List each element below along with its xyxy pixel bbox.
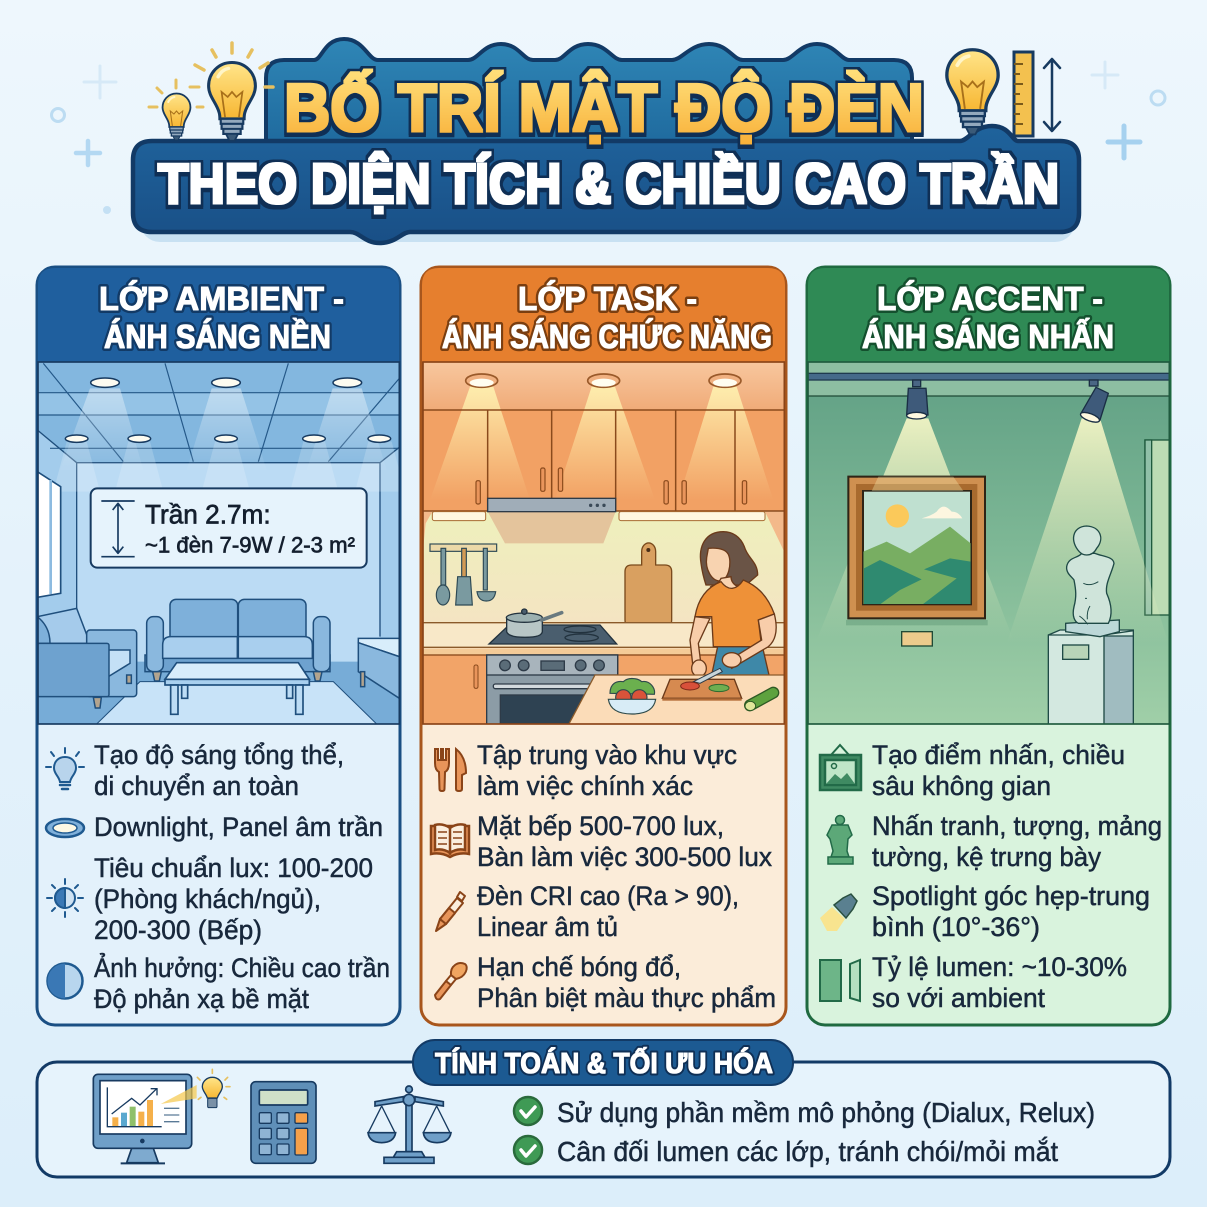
icon: right bulb bbox=[947, 50, 998, 134]
callout: ceiling height bbox=[91, 488, 367, 568]
armchair bbox=[37, 608, 137, 708]
title banner bbox=[133, 39, 1079, 243]
text block: ambient: di chuyển an toàn bbox=[94, 771, 299, 801]
icon: contrast circle bbox=[48, 964, 82, 998]
icon: half sun bbox=[47, 879, 83, 917]
icon: balance scale bbox=[368, 1086, 451, 1163]
woman bbox=[690, 532, 776, 677]
utensil rack bbox=[430, 544, 497, 605]
panel: optimisation bbox=[37, 1040, 1170, 1177]
ceiling soffit bbox=[422, 362, 788, 410]
text block: accent: so với ambient bbox=[872, 983, 1045, 1013]
heading: LỚP ACCENT - bbox=[877, 280, 1103, 317]
text block: ambient: 200-300 (Bếp) bbox=[94, 915, 262, 945]
lower cabinets bbox=[422, 655, 788, 725]
banner upper shape bbox=[266, 39, 912, 145]
right wall panel bbox=[1144, 439, 1168, 616]
illustration: living room bbox=[37, 362, 405, 725]
title line 2: THEO DIỆN TÍCH & CHIỀU CAO TRẦN bbox=[158, 151, 1059, 216]
placard bbox=[902, 632, 932, 646]
text block: ambient: Downlight, Panel âm trần bbox=[94, 812, 383, 842]
text block: task: làm việc chính xác bbox=[477, 771, 693, 801]
text block: ambient: Tạo độ sáng tổng thể, bbox=[94, 740, 344, 770]
icon: calculator bbox=[251, 1082, 316, 1163]
panel header bbox=[422, 268, 785, 362]
text block: task: Đèn CRI cao (Ra > 90), bbox=[477, 881, 739, 911]
heading: LỚP TASK - bbox=[518, 280, 697, 317]
cucumber bbox=[745, 693, 773, 711]
heading: ÁNH SÁNG NỀN bbox=[104, 318, 331, 355]
salad bowl bbox=[608, 679, 656, 714]
range hood bbox=[488, 498, 616, 512]
panel body bbox=[807, 267, 1170, 1025]
icon: statue small bbox=[827, 816, 853, 864]
side cabinet bbox=[358, 638, 399, 698]
icon: picture bbox=[820, 745, 861, 790]
cabinets bbox=[422, 410, 788, 511]
banner shadow bbox=[140, 150, 1075, 242]
oven bbox=[487, 655, 618, 725]
rug bbox=[97, 682, 377, 724]
icon: marker pen bbox=[436, 892, 465, 931]
icon: large bulb bbox=[195, 43, 273, 141]
panel: task bbox=[37, 267, 1175, 1177]
banner lower shape bbox=[133, 126, 1079, 243]
picture bbox=[846, 477, 988, 625]
text block: accent: bình (10°-36°) bbox=[872, 912, 1040, 942]
heading bbox=[99, 280, 344, 355]
coffee table bbox=[165, 663, 309, 714]
text block: task: Linear âm tủ bbox=[477, 912, 618, 942]
text block: ambient: (Phòng khách/ngủ), bbox=[94, 884, 321, 914]
text block: accent: Tạo điểm nhấn, chiều bbox=[872, 740, 1125, 770]
icon: brush bbox=[435, 963, 467, 1000]
icon: panels bbox=[820, 960, 860, 1001]
panel: accent bbox=[37, 267, 1175, 1177]
check item 1: Sử dụng phần mềm mô phỏng (Dialux, Relux) bbox=[557, 1097, 1095, 1128]
title line 1: BỐ TRÍ MẬT ĐỘ ĐÈN bbox=[284, 69, 924, 146]
check item 2: Cân đối lumen các lớp, tránh chói/mỏi mắt bbox=[557, 1136, 1058, 1167]
sofa bbox=[145, 599, 330, 681]
text block: accent: sâu không gian bbox=[872, 771, 1051, 801]
text block: accent: Spotlight góc hẹp-trung bbox=[872, 881, 1150, 911]
icon: ruler bbox=[1014, 52, 1033, 136]
icon: light bulb bbox=[46, 748, 84, 789]
panel: ambient bbox=[37, 267, 1175, 1177]
pedestal bbox=[1048, 620, 1133, 725]
panel body bbox=[37, 267, 400, 1025]
icon: flashlight bbox=[820, 894, 857, 931]
text block: task bbox=[477, 740, 776, 1013]
heading bbox=[862, 280, 1114, 355]
heading pill bbox=[413, 1040, 793, 1085]
beam left bbox=[824, 418, 1006, 622]
illustration: gallery bbox=[807, 362, 1175, 725]
chopping board bbox=[662, 668, 742, 701]
panel body bbox=[421, 267, 786, 1025]
track spotlight left bbox=[907, 380, 928, 419]
cooktop and pot bbox=[489, 609, 617, 644]
text block: task: Phân biệt màu thực phẩm bbox=[477, 983, 776, 1013]
statue bbox=[1067, 526, 1114, 624]
text block: ambient: Độ phản xạ bề mặt bbox=[94, 984, 309, 1014]
light beams bbox=[435, 386, 768, 488]
text block: accent: Tỷ lệ lumen: ~10-30% bbox=[872, 952, 1127, 982]
heading: ÁNH SÁNG NHẤN bbox=[862, 318, 1114, 355]
track spotlight right bbox=[1079, 380, 1108, 424]
heading pill: TÍNH TOÁN & TỐI ƯU HÓA bbox=[435, 1046, 773, 1080]
icon: small bulb with rays bbox=[197, 1069, 230, 1108]
callout: ceiling height: Trần 2.7m: bbox=[145, 499, 271, 529]
icon: fork and knife bbox=[435, 749, 466, 791]
text block: accent bbox=[872, 740, 1162, 1013]
front counter bbox=[568, 675, 785, 725]
text block: task: Hạn chế bóng đổ, bbox=[477, 952, 681, 982]
text block: accent: Nhấn tranh, tượng, mảng bbox=[872, 811, 1162, 841]
icon: open book bbox=[431, 824, 469, 857]
back wall bbox=[77, 463, 380, 663]
illustration: kitchen bbox=[422, 362, 788, 725]
backsplash bbox=[422, 512, 788, 623]
text block: ambient: Tiêu chuẩn lux: 100-200 bbox=[94, 853, 373, 883]
text block: task: Bàn làm việc 300-500 lux bbox=[477, 842, 772, 872]
text block: accent: tường, kệ trưng bày bbox=[872, 842, 1101, 872]
text block: task: Mặt bếp 500-700 lux, bbox=[477, 811, 724, 841]
text block: ambient bbox=[94, 740, 390, 1014]
callout: ceiling height: ~1 đèn 7-9W / 2-3 m² bbox=[145, 533, 355, 558]
cutting board bbox=[625, 543, 672, 626]
decorative sparkles bbox=[52, 62, 1165, 214]
beam right bbox=[1014, 418, 1162, 624]
icon: monitor with chart bbox=[93, 1074, 197, 1163]
heading: LỚP AMBIENT - bbox=[99, 280, 344, 317]
panel frame bbox=[37, 1062, 1170, 1177]
icon: small bulb bbox=[149, 80, 203, 140]
counter bbox=[422, 623, 788, 648]
panel header bbox=[38, 268, 399, 362]
panel header bbox=[808, 268, 1169, 362]
icon: downlight ring bbox=[46, 819, 84, 837]
heading bbox=[442, 280, 772, 355]
text block: task: Tập trung vào khu vực bbox=[477, 740, 737, 770]
icon: height arrow bbox=[1044, 59, 1060, 131]
text block: ambient: Ảnh hưởng: Chiều cao trần bbox=[94, 951, 390, 983]
heading: ÁNH SÁNG CHỨC NĂNG bbox=[442, 318, 772, 355]
